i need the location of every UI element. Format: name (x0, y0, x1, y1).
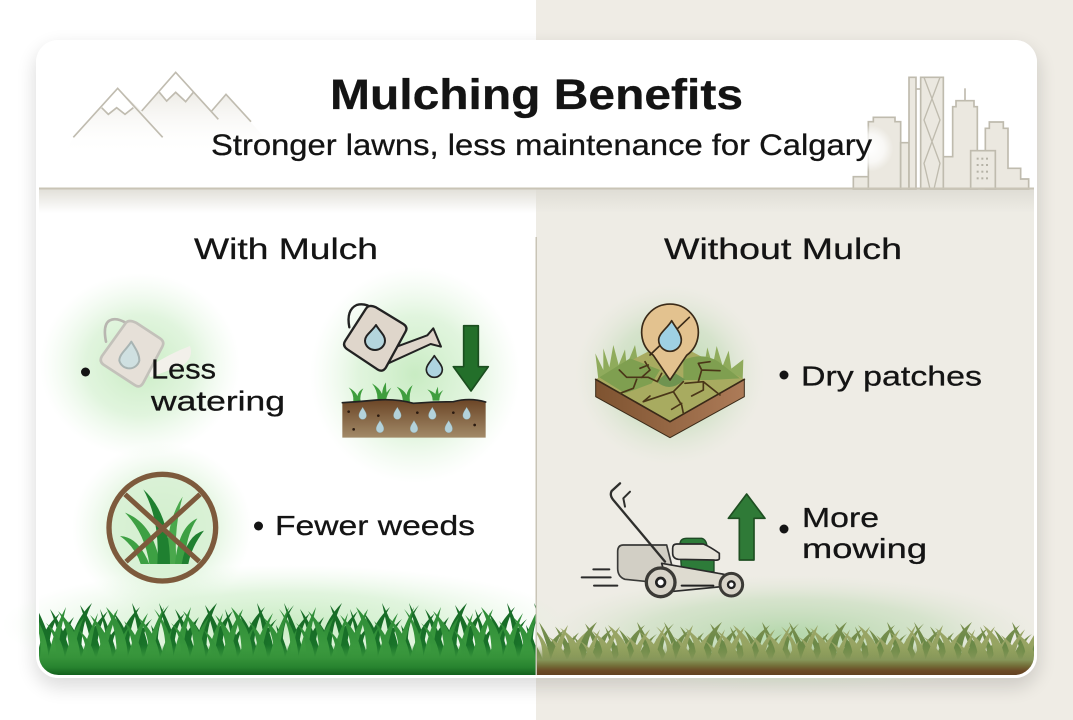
heading: without mulch: Without Mulch (664, 233, 902, 266)
icon: watering can with soil and arrow (342, 304, 488, 438)
icon: faded watering can (101, 319, 191, 386)
icon: no weeds (109, 474, 216, 581)
bullet (780, 370, 788, 380)
label: less watering: watering (150, 386, 285, 416)
bullet (254, 522, 263, 530)
healthy grass strip (39, 603, 536, 675)
label: more mowing (802, 502, 927, 564)
bullet (81, 368, 90, 376)
label: less watering (150, 354, 285, 416)
label: less watering: Less (151, 354, 216, 384)
icon: dry cracked patch (595, 304, 744, 438)
center divider (536, 237, 537, 678)
icon: lawn mower (582, 483, 765, 597)
header rule (36, 188, 1037, 190)
icon: mountains (63, 72, 267, 155)
label: fewer weeds: Fewer weeds (275, 510, 475, 541)
panel: with mulch (39, 237, 536, 675)
label: more mowing: mowing (802, 533, 927, 564)
bullet (780, 524, 788, 534)
panel: without mulch (531, 233, 1049, 695)
label: more mowing: More (802, 502, 879, 533)
dry grass strip (531, 622, 1049, 678)
title: Mulching Benefits (330, 71, 743, 119)
heading: with mulch: With Mulch (194, 233, 378, 266)
green glows (540, 285, 1040, 695)
label: dry patches: Dry patches (801, 360, 982, 392)
green glows (2, 267, 572, 685)
panel: header (36, 71, 1037, 190)
subtitle: Stronger lawns, less maintenance for Calgary (211, 129, 872, 162)
icon: city skyline (847, 77, 1029, 189)
